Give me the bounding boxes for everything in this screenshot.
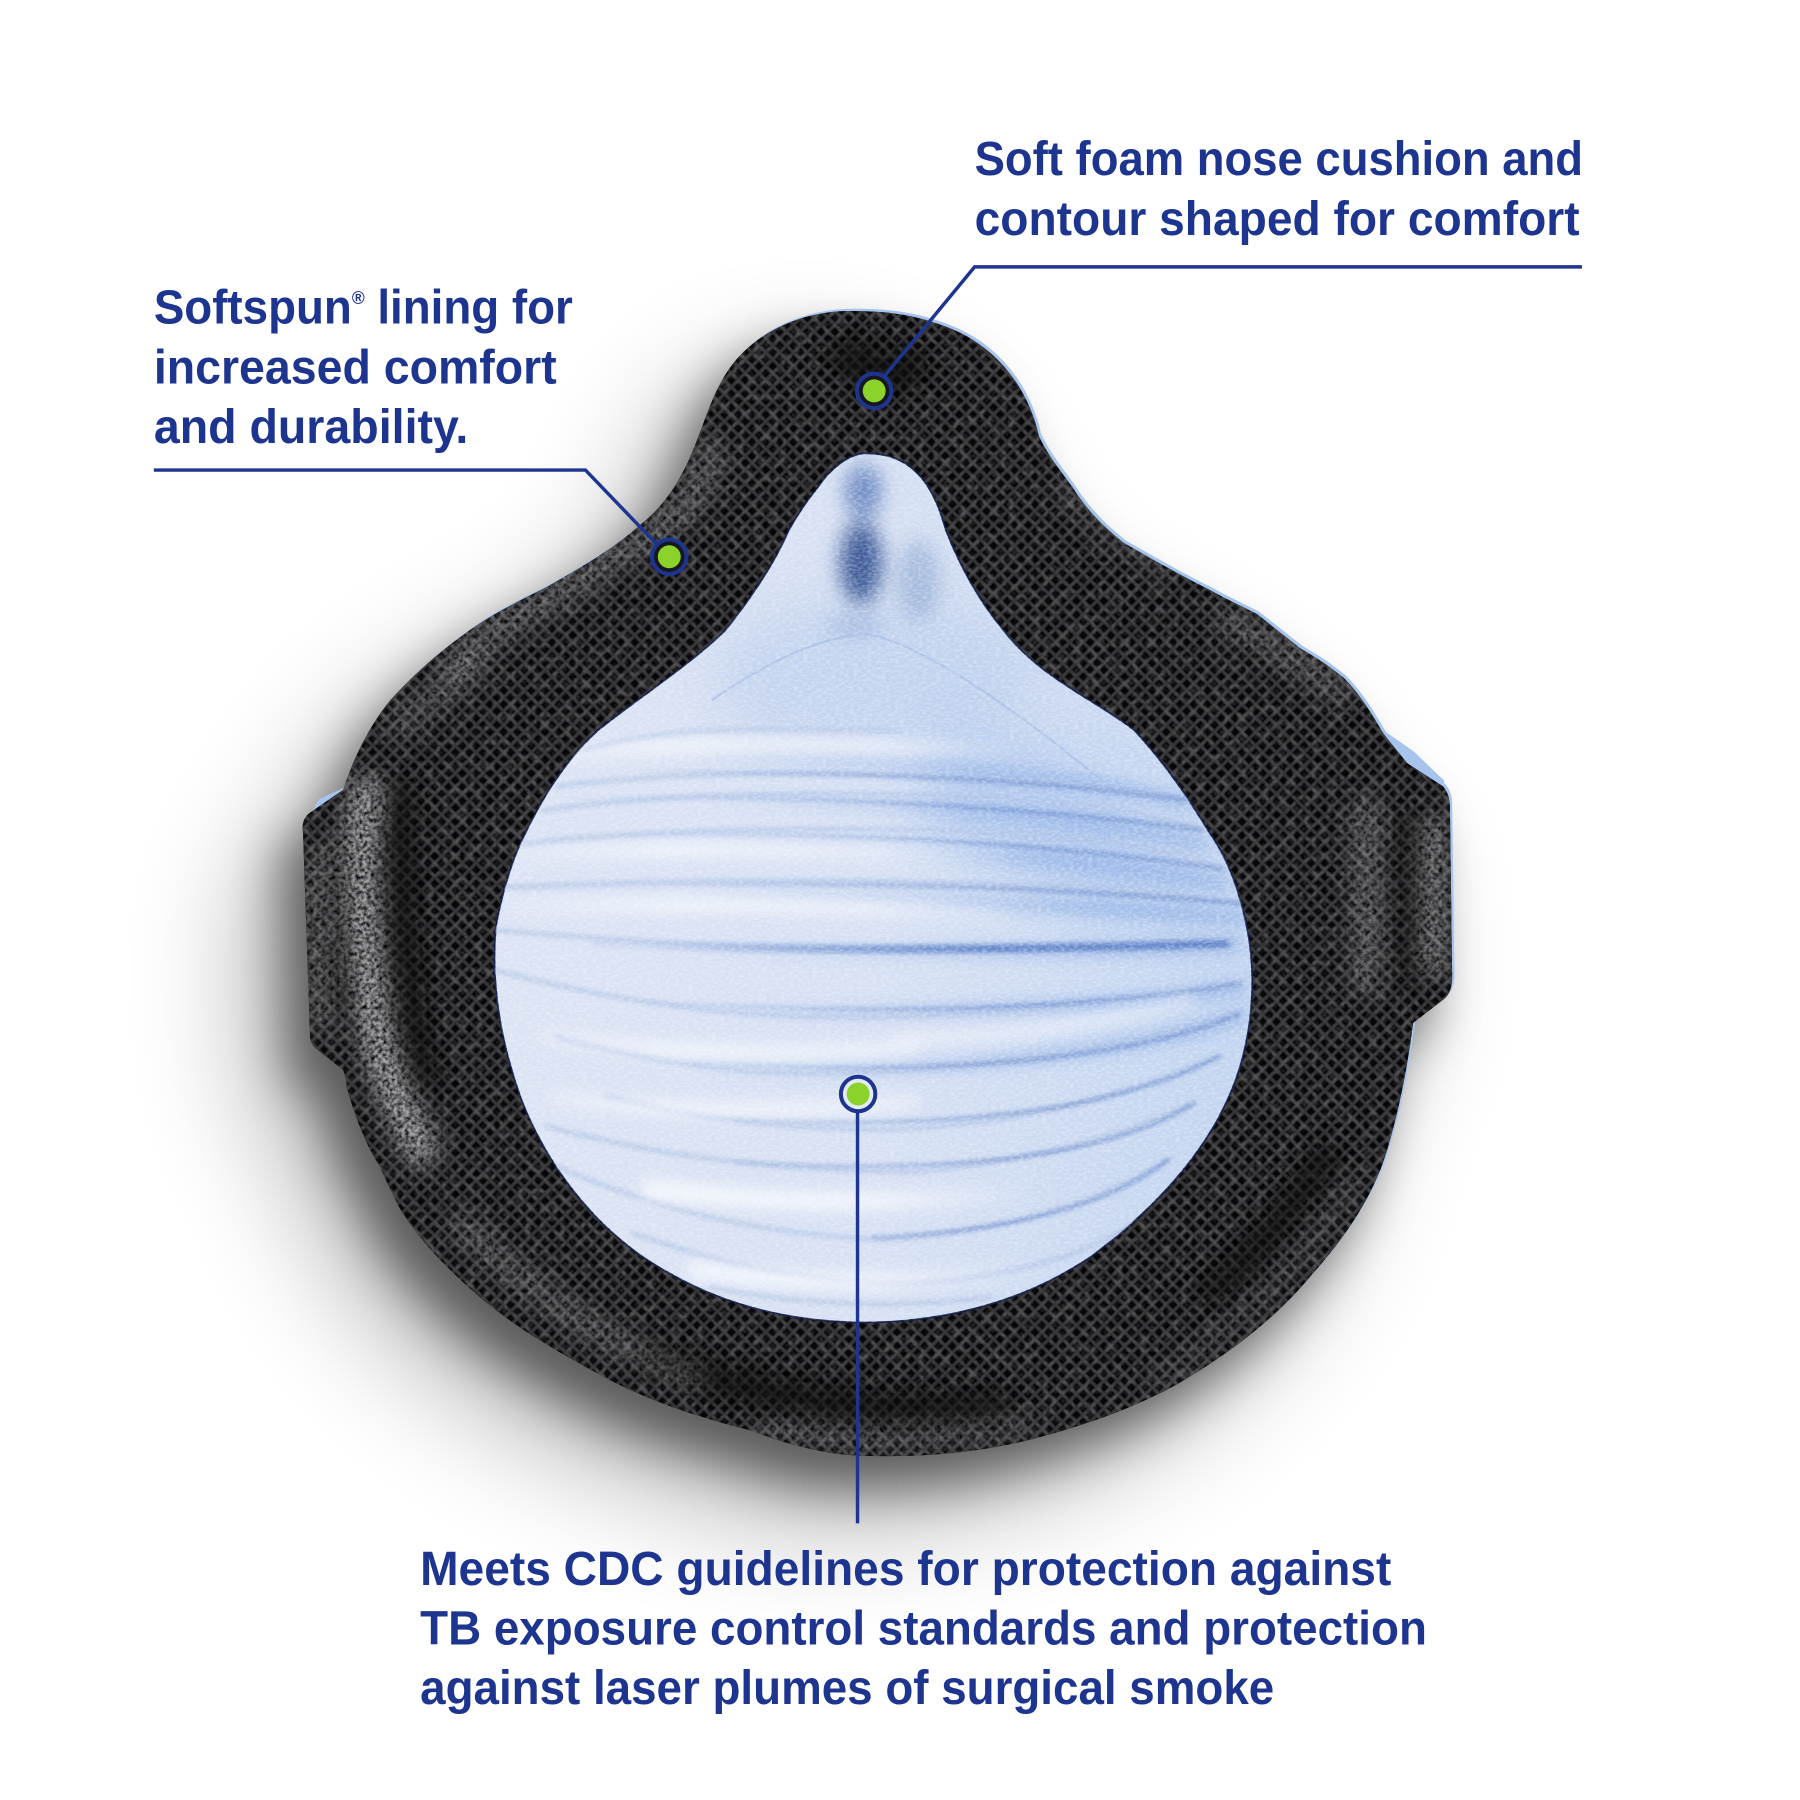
- callout text: and durability.: [154, 400, 468, 454]
- callout text: Meets CDC guidelines for protection against: [420, 1542, 1391, 1596]
- soft pleat lines: [495, 730, 1240, 1304]
- marker dot: [841, 1077, 875, 1111]
- callout text: increased comfort: [154, 340, 557, 394]
- callout text: Softspun: [154, 281, 363, 335]
- black mesh seal: [298, 304, 1458, 1464]
- callout: CDC guidelines: [420, 1077, 1427, 1715]
- pleats: [495, 730, 1240, 1304]
- soft drop shadow: [248, 343, 1429, 1519]
- blue outer shell peeking out: [305, 309, 1454, 1454]
- upper body tint: [712, 597, 1033, 758]
- callout text: against laser plumes of surgical smoke: [420, 1661, 1274, 1715]
- right side blue tint: [918, 735, 1228, 918]
- white pleat highlights: [512, 732, 997, 1292]
- broad blue shading bands: [782, 758, 1250, 1079]
- callout text: [975, 132, 1583, 246]
- nose folds: [828, 464, 939, 633]
- callout text: [154, 281, 573, 454]
- callout text: Soft foam nose cushion and: [975, 132, 1583, 186]
- pale blue filter interior: [482, 448, 1263, 1332]
- callout text: contour shaped for comfort: [975, 192, 1580, 246]
- mottled fibre sheen: [298, 304, 1458, 1464]
- callout text: ®: [352, 287, 365, 308]
- marker dot: [857, 374, 891, 408]
- glossy speckled bands: [320, 442, 1433, 1438]
- fibre texture: [482, 448, 1263, 1332]
- callout text: lining for: [365, 281, 573, 335]
- callout text: [420, 1542, 1427, 1715]
- mask product illustration: [248, 304, 1458, 1519]
- callout: Softspun lining: [154, 281, 686, 574]
- leader line: [885, 267, 1582, 375]
- crisp blue pleat lines: [668, 770, 1242, 1241]
- smooth dark folds: [344, 344, 1412, 1408]
- callout text: TB exposure control standards and protection: [420, 1601, 1427, 1655]
- seal highlights: [298, 304, 1458, 1464]
- marker dot: [652, 540, 686, 574]
- leader line: [856, 1111, 859, 1523]
- leader line: [154, 470, 657, 544]
- callout: nose cushion: [857, 132, 1583, 408]
